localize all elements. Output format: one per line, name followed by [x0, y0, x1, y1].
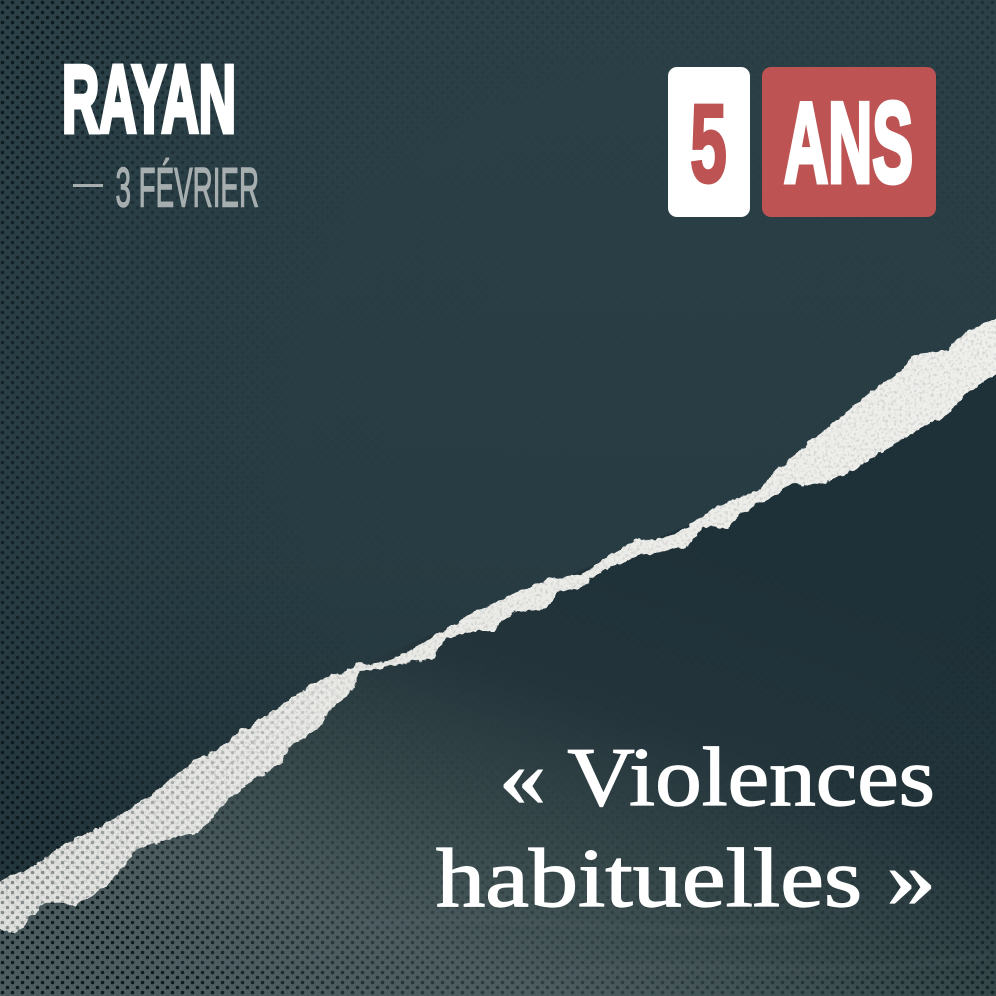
background: lower sheet — [0, 350, 996, 996]
badge: number box — [668, 67, 750, 217]
lower streaks — [30, 919, 990, 975]
age badge — [668, 67, 936, 217]
infographic canvas: 3 FÉVRIER — [116, 156, 259, 218]
torn paper strip — [0, 300, 996, 950]
quote line 2: habituelles » — [436, 832, 936, 925]
badge: unit box — [762, 67, 936, 217]
date dash — [73, 184, 103, 187]
date line — [73, 156, 259, 218]
heading: name: RAYAN — [62, 46, 236, 153]
quote — [436, 731, 936, 925]
badge: number: 5 — [690, 82, 727, 206]
quote line 1: « Violences — [499, 731, 935, 824]
